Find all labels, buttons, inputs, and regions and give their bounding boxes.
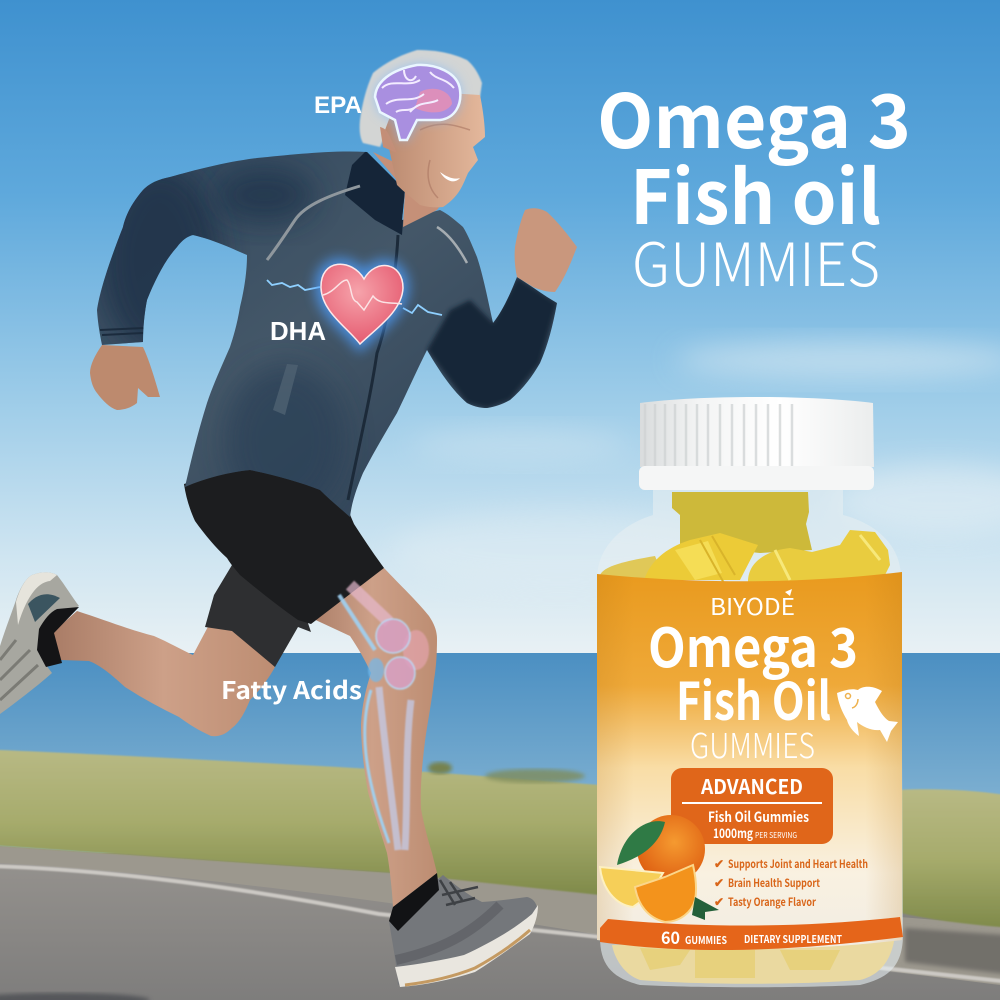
bottle heading: Omega 3: [648, 604, 858, 683]
label: EPA: EPA: [314, 92, 362, 119]
label panel: [597, 572, 902, 949]
hair: [360, 50, 482, 147]
icon: fish: [837, 687, 898, 742]
gummies at base: [612, 935, 895, 984]
runner figure: [0, 50, 577, 987]
bottle GUMMIES: GUMMIES: [690, 719, 815, 768]
advanced badge: [671, 768, 833, 844]
jacket: [90, 145, 570, 525]
advanced badge: ADVANCED: [700, 771, 803, 800]
benefits list: Supports Joint and Heart Health: [728, 856, 868, 872]
left hand: [90, 345, 160, 410]
bottom strip: [600, 917, 903, 950]
bottle heading: Fish Oil: [676, 660, 831, 735]
title: Omega 3: [597, 63, 911, 170]
product bottle: [597, 397, 903, 987]
knee joint x-ray overlay: [339, 585, 429, 850]
title: Fish oil: [630, 139, 881, 246]
benefits list: ✔: [714, 876, 724, 890]
title: [597, 63, 911, 304]
benefits list: ✔: [714, 857, 724, 871]
icon: glowing heart: [267, 264, 442, 344]
front sock: [389, 873, 439, 931]
gummies in shoulder: [600, 492, 890, 585]
bottle body: [597, 488, 903, 987]
cap: [639, 397, 874, 490]
front shoe: [389, 873, 538, 987]
label: DHA: DHA: [270, 316, 326, 346]
bottom strip: 60: [661, 924, 680, 949]
front leg: [307, 568, 437, 907]
back sock: [37, 607, 79, 667]
bottle heading: [648, 604, 858, 735]
back leg: [52, 611, 275, 736]
brand: BIYODE: [710, 588, 795, 622]
benefits list: ✔: [714, 895, 724, 909]
benefits list: Tasty Orange Flavor: [728, 894, 816, 910]
back shoe: [0, 572, 79, 714]
right hand: [515, 208, 577, 292]
bottom strip: DIETARY SUPPLEMENT: [744, 932, 842, 947]
icon: glowing brain: [375, 65, 460, 140]
label: Fatty Acids: Fatty Acids: [221, 671, 362, 706]
title: GUMMIES: [632, 217, 880, 304]
face: [385, 90, 485, 207]
advanced badge: Fish Oil Gummies: [708, 807, 809, 827]
benefits list: Brain Health Support: [728, 875, 820, 891]
advanced badge: PER SERVING: [755, 830, 797, 841]
gummy lumps at base: [640, 948, 840, 978]
bottom strip: GUMMIES: [685, 933, 727, 948]
shorts: [184, 464, 384, 667]
ear: [380, 127, 397, 153]
neck: [373, 152, 452, 227]
advanced badge: 1000mg: [713, 823, 753, 842]
oranges: [600, 815, 719, 922]
benefits list: [714, 856, 868, 910]
